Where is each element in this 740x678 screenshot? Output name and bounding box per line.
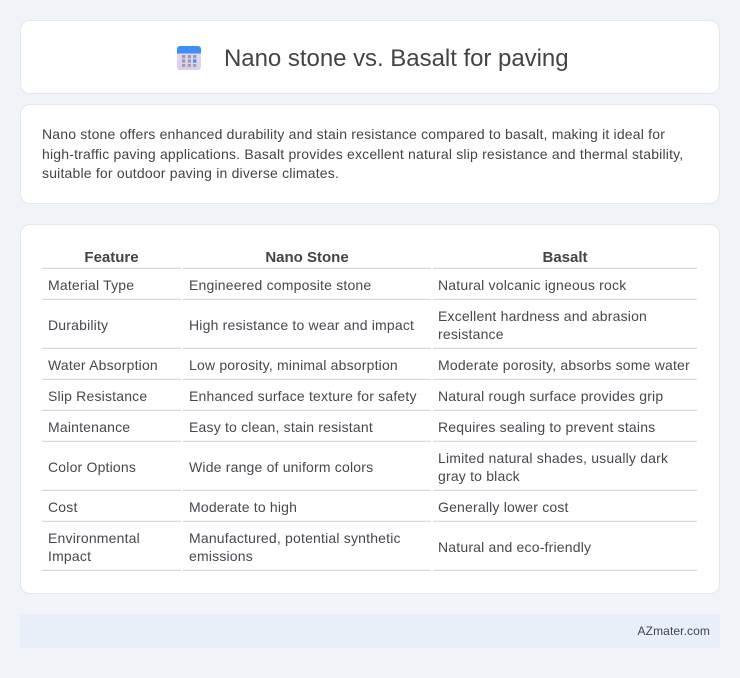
title card [20, 20, 720, 94]
row: slip resistance: Slip Resistance [48, 388, 147, 404]
table header: Nano Stone [265, 249, 349, 266]
row: environmental impact: Impact [48, 548, 91, 564]
row: durability [48, 308, 647, 342]
row: maintenance: Requires sealing to prevent stains [438, 419, 655, 435]
row: water absorption: Water Absorption [48, 357, 158, 373]
row: material type [48, 277, 626, 293]
row: durability: resistance [438, 326, 504, 342]
panel: comparison table [20, 224, 720, 594]
row: cost: Generally lower cost [438, 499, 569, 515]
row: material type: Material Type [48, 277, 134, 293]
row: environmental impact: emissions [189, 548, 253, 564]
row: environmental impact: Natural and eco-friendly [438, 539, 591, 555]
row: durability: Excellent hardness and abrasion [438, 308, 647, 324]
row: color options: Wide range of uniform colors [189, 459, 373, 475]
title: Nano stone vs. Basalt for paving [224, 45, 569, 72]
row: water absorption [48, 357, 690, 373]
row: color options [48, 450, 668, 484]
summary text: high-traffic paving applications. Basalt provides excellent natural slip resistance and thermal stability, [42, 146, 683, 162]
row: water absorption: Low porosity, minimal absorption [189, 357, 398, 373]
row: slip resistance: Enhanced surface texture for safety [189, 388, 417, 404]
row: slip resistance [48, 388, 663, 404]
row: color options: Limited natural shades, usually dark [438, 450, 668, 466]
row: material type: Engineered composite stone [189, 277, 371, 293]
row: material type: Natural volcanic igneous rock [438, 277, 626, 293]
summary text: Nano stone offers enhanced durability and stain resistance compared to basalt, making it ideal for [42, 126, 665, 142]
panel: summary [20, 104, 720, 204]
icon: calendar grid [177, 46, 201, 70]
table header [84, 249, 588, 266]
row: environmental impact: Manufactured, potential synthetic [189, 530, 401, 546]
row: environmental impact [48, 530, 591, 564]
row: cost: Moderate to high [189, 499, 297, 515]
row: cost [48, 499, 569, 515]
row: color options: gray to black [438, 468, 520, 484]
row: cost: Cost [48, 499, 78, 515]
row: maintenance [48, 419, 655, 435]
row: durability: High resistance to wear and impact [189, 317, 414, 333]
row: durability: Durability [48, 317, 108, 333]
footer bar [20, 614, 720, 648]
row: slip resistance: Natural rough surface provides grip [438, 388, 663, 404]
footer credit: AZmater.com [638, 624, 710, 638]
row: color options: Color Options [48, 459, 136, 475]
summary text: suitable for outdoor paving in diverse climates. [42, 165, 339, 181]
summary text [42, 126, 683, 181]
row: environmental impact: Environmental [48, 530, 140, 546]
row: maintenance: Easy to clean, stain resistant [189, 419, 373, 435]
row: maintenance: Maintenance [48, 419, 130, 435]
table header: Feature [84, 249, 139, 266]
table header: Basalt [542, 249, 588, 266]
row: water absorption: Moderate porosity, absorbs some water [438, 357, 690, 373]
